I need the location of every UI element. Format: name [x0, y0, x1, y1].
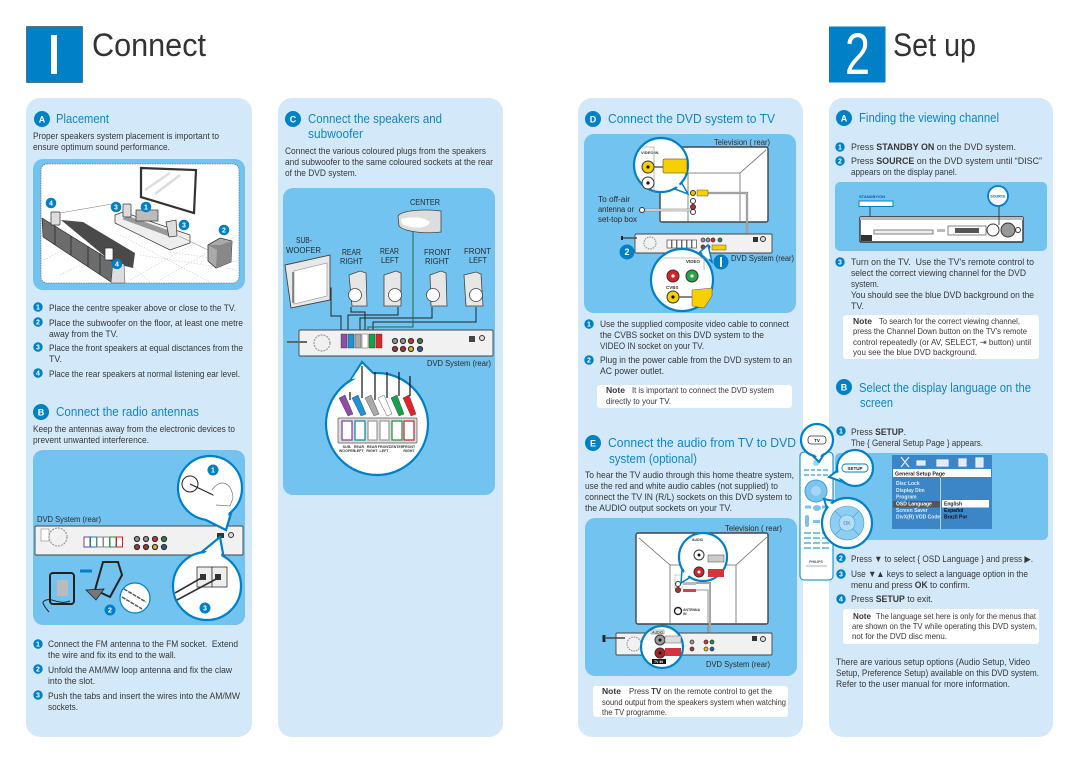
badge A: A [39, 114, 46, 124]
TV rear: IN [683, 612, 687, 616]
step 2-4: language selection: 4 [839, 596, 843, 604]
OSD menu: OSD Language [896, 502, 932, 508]
step 2-4: language selection: menu and press OK to confirm. [851, 580, 970, 590]
text: speakers intro [285, 146, 493, 178]
OSD menu: DivX(R) VOD Code [896, 514, 940, 520]
title: Connect: Connect [92, 27, 206, 63]
note: press TV: Note [602, 686, 621, 696]
badge D [585, 111, 601, 127]
note: connect directly: Note [606, 385, 625, 395]
badge B [33, 404, 49, 420]
callout: coloured plugs and sockets: WOOFER [339, 449, 355, 453]
step 3: turn on the TV: system. [851, 279, 879, 289]
note: language menus: Note [853, 611, 871, 621]
badge C: C [290, 114, 297, 124]
callout: coloured plugs and sockets: REAR [354, 445, 364, 449]
number markers: 2 [222, 228, 226, 234]
OSD menu: Display Dim [896, 488, 925, 494]
couch [42, 218, 135, 283]
callout: SETUP button: SETUP [847, 466, 863, 471]
OSD menu: Disc Lock [896, 481, 920, 487]
steps: DVD to TV: Plug in the power cable from the DVD system to an [600, 355, 792, 365]
heading: display language [859, 380, 1031, 410]
illustration: remote control [800, 424, 873, 580]
step 2-4: language selection: 3 [839, 572, 843, 578]
steps: standby and source: Press SOURCE on the DVD system until “DISC” [851, 156, 1042, 166]
note: search channel: Note [853, 316, 872, 326]
number markers: 3 [182, 222, 186, 230]
number markers: 4 [49, 200, 53, 208]
TV [141, 168, 196, 213]
text: antennas intro: prevent unwanted interference. [33, 435, 149, 445]
note: press TV: Press TV on the remote control to get the [629, 686, 772, 696]
callout: coloured plugs and sockets: REAR [367, 445, 377, 449]
steps: antennas: Push the tabs and insert the wires into the AM/MW [48, 691, 240, 701]
callout: source button: SOURCE [991, 194, 1006, 198]
steps: DVD to TV: Use the supplied composite video cable to connect [600, 319, 789, 329]
illustration: speaker room placement [33, 159, 245, 290]
text: other setup options [836, 657, 1039, 689]
steps: DVD to TV: AC power outlet. [600, 366, 664, 376]
OSD menu [892, 455, 992, 529]
text: placement intro [33, 131, 219, 152]
number markers: 1 [144, 204, 148, 212]
TV rear: ANTENNA [683, 608, 701, 612]
steps: antennas: 3 [36, 692, 40, 700]
illustration: setup menu [835, 453, 1048, 540]
steps: antennas: 1 [36, 642, 40, 648]
steps: antennas: into the slot. [48, 676, 95, 686]
standby label: STANDBY/ON [859, 194, 885, 199]
panel: set up [829, 98, 1053, 737]
DVD rear panel [287, 330, 493, 356]
speaker labels: REAR [342, 247, 361, 257]
steps: DVD to TV: 2 [587, 358, 591, 364]
note: search channel: control repeatedly (or AV, SELECT, ⇥ button) until [853, 337, 1031, 347]
callout: DVD TV IN sockets [641, 626, 683, 668]
step 1: press setup: Press SETUP. [851, 427, 906, 437]
steps: placement: TV. [49, 354, 62, 364]
text: other setup options: There are various setup options (Audio Setup, Video [836, 657, 1030, 667]
remote body [800, 452, 833, 580]
callout: DVD CVBS socket: VIDEO [686, 259, 701, 264]
label: off-air antenna: antenna or [598, 204, 634, 214]
callout: OK navigation pad [822, 498, 872, 548]
callout: coloured plugs and sockets: FRONT [403, 445, 416, 449]
heading: speakers: subwoofer [308, 126, 364, 141]
note: search channel: you see the blue DVD background. [853, 347, 977, 357]
speaker labels: RIGHT [425, 256, 450, 266]
steps: placement: Place the subwoofer on the floor, at least one metre [49, 318, 243, 328]
center speaker [398, 210, 441, 233]
steps: placement [33, 302, 243, 379]
steps: placement: Place the centre speaker above or close to the TV. [49, 303, 236, 313]
step 2-4: language selection: 2 [839, 556, 843, 562]
heading: Placement: Placement [56, 111, 109, 126]
TV rear [636, 533, 768, 624]
note: language menus: are shown on the TV while operating this DVD system, [852, 621, 1037, 631]
callout: coloured plugs and sockets: CENTER [389, 445, 404, 449]
heading: audio: Connect the audio from TV to DVD [608, 435, 796, 450]
label: DVD System rear: DVD System (rear) [706, 659, 770, 669]
callout: coloured plugs and sockets: RIGHT [403, 449, 415, 453]
speaker labels: CENTER [410, 197, 440, 207]
badge E [585, 435, 601, 451]
steps: DVD to TV [584, 319, 792, 376]
callout: TV audio sockets: AUDIO [692, 538, 704, 542]
OSD menu: Brazil Por [944, 514, 967, 520]
text: audio intro: connect the TV IN (R/L) sockets on this DVD system to [585, 492, 792, 502]
steps: standby and source: 1 [838, 144, 842, 152]
text: audio intro: use the red and white audio cables (not supplied) to [585, 481, 778, 491]
badge A [34, 111, 50, 127]
heading: Connect the radio antennas: Connect the radio antennas [56, 404, 199, 419]
text: placement intro: Proper speakers system placement is important to [33, 131, 219, 141]
number markers: 4 [115, 262, 119, 268]
note: language menus [843, 609, 1039, 644]
illustration: audio cable [585, 518, 797, 676]
steps: placement: away from the TV. [49, 329, 118, 339]
AM/MW loop antenna: 2 [108, 608, 112, 614]
speaker labels: FRONT [424, 247, 452, 257]
callout: FM antenna 1 [178, 456, 242, 530]
speaker labels: FRONT [464, 246, 492, 256]
illustration: antenna connection [33, 450, 245, 625]
callout: TV button [801, 424, 833, 462]
badge A: A [841, 114, 848, 124]
text: other setup options: Setup, Preference Setup) available on this DVD system. [836, 668, 1039, 678]
label: DVD System rear: DVD System (rear) [427, 358, 491, 368]
text: speakers intro: and subwoofer to the same coloured sockets at the rear [285, 157, 493, 167]
label: DVD System rear: DVD System (rear) [37, 514, 101, 524]
step 1: press setup: The { General Setup Page } appears. [851, 438, 983, 448]
step 2-4: language selection: Press SETUP to exit. [851, 594, 933, 604]
icon: number 1 box [26, 26, 82, 82]
callout: OK navigation pad: OK [843, 521, 851, 527]
DVD rear panel [604, 633, 772, 655]
DVD front [860, 217, 1023, 242]
step 1: press setup [836, 426, 983, 448]
step 3: turn on the TV: TV. [851, 301, 864, 311]
callout: coloured plugs and sockets: SUB- [343, 445, 352, 449]
callout: FM antenna 1: 1 [211, 468, 215, 474]
speaker labels: LEFT [381, 255, 400, 265]
badge B: B [841, 382, 848, 392]
steps: placement: 3 [36, 344, 40, 352]
steps: DVD to TV: the CVBS socket on this DVD system to the [600, 330, 764, 340]
text: speakers intro: of the DVD system. [285, 168, 357, 178]
badge B [836, 379, 852, 395]
text: placement intro: ensure optimum sound performance. [33, 142, 170, 152]
steps: antennas: sockets. [48, 702, 78, 712]
note: connect directly: directly to your TV. [606, 396, 671, 406]
callout: coloured plugs and sockets: LEFT [380, 449, 389, 453]
video cable [700, 193, 747, 247]
OSD menu: Español [944, 508, 964, 514]
callout: AM/MW terminals 3 [173, 537, 241, 620]
speaker labels [286, 197, 492, 266]
panel: connect the speakers and subwoofer [278, 98, 503, 737]
OSD menu: Program [896, 494, 917, 500]
remote body: PHILIPS [809, 560, 823, 564]
step 2-4: language selection: Press ▼ to select { OSD Language } and press ▶. [851, 554, 1033, 564]
badge E: E [590, 438, 596, 448]
title: Set up: Set up [893, 27, 976, 63]
note: language menus: The language set here is only for the menus that [876, 611, 1037, 621]
steps: standby and source: Press STANDBY ON on the DVD system. [851, 142, 1016, 152]
callout: DVD TV IN sockets: AUDIO [652, 630, 664, 634]
illustration: DVD front panel [835, 182, 1047, 251]
header: step 2 Set up [829, 22, 976, 87]
callout: DVD CVBS socket: CVBS [666, 285, 679, 290]
steps: placement: Place the rear speakers at normal listening ear level. [49, 369, 240, 379]
step 2-4: language selection [836, 553, 1033, 604]
callout: DVD CVBS socket [651, 245, 713, 311]
steps: antennas [33, 639, 240, 712]
panel: DVD to TV and audio [578, 98, 803, 737]
note: press TV [593, 686, 788, 717]
marker 1 [714, 254, 728, 270]
step 3: turn on the TV: You should see the blue DVD background on the [851, 290, 1034, 300]
callout: coloured plugs and sockets: RIGHT [366, 449, 378, 453]
note: press TV: the TV programme. [602, 707, 667, 717]
speakers [348, 271, 483, 306]
TV rear [660, 147, 768, 222]
wires [330, 232, 476, 333]
steps: placement: Place the front speakers at equal disctances from the [49, 343, 243, 353]
badge A [836, 110, 852, 126]
callout: TV audio sockets [679, 533, 727, 583]
icon: number 2 box [829, 22, 886, 87]
text: speakers intro: Connect the various coloured plugs from the speakers [285, 146, 486, 156]
label: DVD System rear: DVD System (rear) [731, 253, 794, 263]
AM/MW loop antenna [43, 562, 150, 616]
illustration: speaker wiring [283, 188, 495, 495]
TV stand [115, 212, 190, 250]
steps: standby and source: appears on the display panel. [851, 167, 957, 177]
number markers: 3 [114, 204, 118, 212]
icon: number 2 box: 2 [845, 22, 870, 87]
marker 2: 2 [624, 247, 630, 257]
step 2-4: language selection: Use ▼▲ keys to select a language option in the [851, 569, 1028, 579]
speaker labels: SUB- [296, 235, 312, 245]
note: connect directly [597, 385, 792, 408]
heading: speakers [308, 111, 442, 141]
callout: TV button: TV [814, 438, 820, 443]
callout: TV video in socket [634, 138, 688, 194]
heading: display language: screen [860, 395, 893, 410]
steps: placement: 1 [36, 304, 40, 312]
heading: audio [608, 435, 796, 466]
label: off-air antenna [598, 194, 638, 224]
text: audio intro: To hear the TV audio through this home theatre system, [585, 470, 794, 480]
illustration: DVD to TV video cable [584, 134, 796, 313]
callout: coloured plugs and sockets [326, 362, 428, 475]
step 3: turn on the TV [835, 257, 1034, 311]
badge B: B [38, 408, 45, 418]
heading: audio: system (optional) [609, 451, 697, 466]
speaker labels: LEFT [469, 255, 488, 265]
note: language menus: not for the DVD disc menu. [852, 631, 947, 641]
speaker labels: RIGHT [340, 256, 364, 266]
step 3: turn on the TV: select the correct viewing channel for the DVD [851, 268, 1026, 278]
label: Television rear: Television ( rear) [714, 137, 770, 147]
label: Television rear: Television ( rear) [725, 523, 782, 533]
steps: standby and source: 2 [838, 158, 842, 166]
callout: source button [988, 186, 1008, 225]
steps: antennas: Connect the FM antenna to the FM socket. Extend [48, 639, 238, 649]
steps: standby and source [835, 142, 1042, 177]
OSD menu: English [944, 502, 962, 508]
standby label [859, 194, 893, 236]
panel: placement and radio antennas [26, 98, 252, 737]
OSD menu: Screen Saver [896, 508, 928, 514]
step 3: turn on the TV: 3 [838, 260, 842, 266]
subwoofer [285, 255, 330, 308]
steps: DVD to TV: 1 [587, 322, 591, 328]
speakers [51, 204, 177, 260]
step 3: turn on the TV: Turn on the TV. Use the TV’s remote control to [851, 257, 1034, 267]
header: step 1 Connect [26, 26, 206, 82]
callout: coloured plugs and sockets: FRONT [378, 445, 391, 449]
callout: AM/MW terminals 3: 3 [203, 606, 207, 612]
speaker labels: WOOFER [286, 245, 321, 255]
badge D: D [590, 114, 597, 124]
callout: SETUP button [829, 450, 873, 486]
callout: TV video in socket: VIDEO IN [641, 150, 659, 155]
heading: speakers: Connect the speakers and [308, 111, 442, 126]
steps: antennas: Unfold the AM/MW loop antenna and fix the claw [48, 665, 232, 675]
steps: DVD to TV: VIDEO IN socket on your TV. [600, 341, 704, 351]
text: audio intro: the AUDIO output sockets on your TV. [585, 503, 732, 513]
note: search channel: To search for the correct viewing channel, [879, 316, 1020, 326]
text: antennas intro [33, 424, 235, 445]
steps: placement: 4 [36, 370, 40, 378]
note: connect directly: It is important to connect the DVD system [632, 385, 774, 395]
antenna cable [640, 208, 690, 212]
note: search channel [843, 315, 1039, 359]
number markers [46, 198, 229, 269]
callout: coloured plugs and sockets: LEFT [355, 449, 364, 453]
text: antennas intro: Keep the antennas away from the electronic devices to [33, 424, 235, 434]
text: other setup options: Refer to the user manual for more information. [836, 679, 1010, 689]
note: search channel: press the Channel Down button on the TV’s remote [853, 326, 1027, 336]
audio cable [696, 583, 710, 650]
label: off-air antenna: To off-air [598, 194, 630, 204]
heading: Finding the viewing channel: Finding the viewing channel [859, 110, 999, 125]
badge C [285, 111, 301, 127]
DVD rear panel [622, 234, 772, 253]
label: off-air antenna: set-top box [598, 214, 638, 224]
steps: antennas: 2 [36, 666, 40, 674]
steps: placement: 2 [36, 320, 40, 326]
callout: DVD TV IN sockets: TV IN [654, 660, 663, 664]
text: audio intro [585, 470, 794, 513]
DVD rear panel [35, 526, 243, 555]
step 1: press setup: 1 [839, 428, 843, 436]
OSD menu: General Setup Page [895, 472, 945, 478]
heading: display language: Select the display language on the [859, 380, 1031, 395]
subwoofer [208, 238, 232, 268]
speaker labels: REAR [380, 246, 399, 256]
note: press TV: sound output from the speakers system when watching [602, 697, 786, 707]
heading: Connect the DVD system to TV: Connect the DVD system to TV [608, 111, 775, 126]
marker 2 [620, 244, 634, 260]
steps: antennas: the wire and fix its end to the wall. [48, 650, 176, 660]
